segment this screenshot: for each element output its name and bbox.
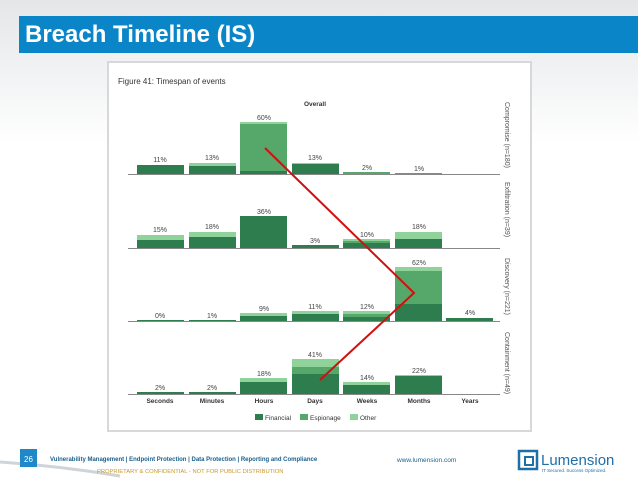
row: compromise: 13% xyxy=(205,155,219,162)
row: discovery: Discovery (n=221) xyxy=(503,258,510,315)
row: exfiltration: 18% xyxy=(412,224,426,231)
page number xyxy=(20,449,37,467)
row: discovery xyxy=(137,258,510,321)
row: discovery: 12% xyxy=(360,304,374,311)
x axis labels: Seconds xyxy=(146,398,174,405)
footer swoosh xyxy=(0,462,120,476)
arrow: red trend line xyxy=(265,148,414,380)
title: Breach Timeline (IS) xyxy=(25,21,255,48)
row: exfiltration: 15% xyxy=(153,227,167,234)
row: compromise: 1% xyxy=(414,166,424,173)
row: exfiltration: 10% xyxy=(360,232,374,239)
row: containment xyxy=(137,332,510,394)
logo: IT Secured. Success Optimized. xyxy=(542,468,606,473)
x axis labels: Weeks xyxy=(357,398,378,405)
footer text: Vulnerability Management | Endpoint Protection | Data Protection | Reporting and Compliance xyxy=(50,457,318,463)
row: discovery: 4% xyxy=(465,310,475,317)
x axis labels: Months xyxy=(407,398,431,405)
row: compromise: 2% xyxy=(362,165,372,172)
row: exfiltration: Exfiltration (n=39) xyxy=(503,182,510,237)
x axis labels: Hours xyxy=(255,398,274,405)
row: containment: 22% xyxy=(412,368,426,375)
footer text xyxy=(50,457,318,475)
row: containment: 18% xyxy=(257,371,271,378)
row: containment: 14% xyxy=(360,375,374,382)
row: compromise xyxy=(137,102,510,174)
row: containment: 2% xyxy=(155,385,165,392)
row: discovery: 9% xyxy=(259,306,269,313)
x axis labels xyxy=(146,398,479,405)
figure title: Figure 41: Timespan of events xyxy=(118,77,226,86)
row: compromise: 60% xyxy=(257,115,271,122)
row: exfiltration: 3% xyxy=(310,238,320,245)
x axis labels: Years xyxy=(461,398,479,405)
row: discovery: 1% xyxy=(207,313,217,320)
row: discovery: 62% xyxy=(412,260,426,267)
logo: Lumension xyxy=(541,452,614,469)
row: discovery: 0% xyxy=(155,313,165,320)
row: exfiltration: 18% xyxy=(205,224,219,231)
row: containment: Containment (n=49) xyxy=(503,332,510,394)
overall label: Overall xyxy=(304,101,326,108)
x axis labels: Days xyxy=(307,398,323,405)
row: containment: 2% xyxy=(207,385,217,392)
row: compromise: 11% xyxy=(153,157,167,164)
row: compromise: 13% xyxy=(308,155,322,162)
x axis labels: Minutes xyxy=(200,398,225,405)
title xyxy=(19,16,638,53)
row: containment: 41% xyxy=(308,352,322,359)
page number: 26 xyxy=(24,455,33,464)
url: www.lumension.com xyxy=(396,457,456,464)
row: exfiltration xyxy=(137,182,510,248)
legend xyxy=(255,414,377,422)
row: discovery: 11% xyxy=(308,304,322,311)
row: compromise: Compromise (n=180) xyxy=(503,102,510,168)
legend: Espionage xyxy=(310,415,341,422)
legend: Financial xyxy=(265,415,292,422)
legend: Other xyxy=(360,415,377,422)
logo xyxy=(519,451,614,473)
footer text: PROPRIETARY & CONFIDENTIAL - NOT FOR PUBLIC DISTRIBUTION xyxy=(97,469,284,475)
row: exfiltration: 36% xyxy=(257,209,271,216)
